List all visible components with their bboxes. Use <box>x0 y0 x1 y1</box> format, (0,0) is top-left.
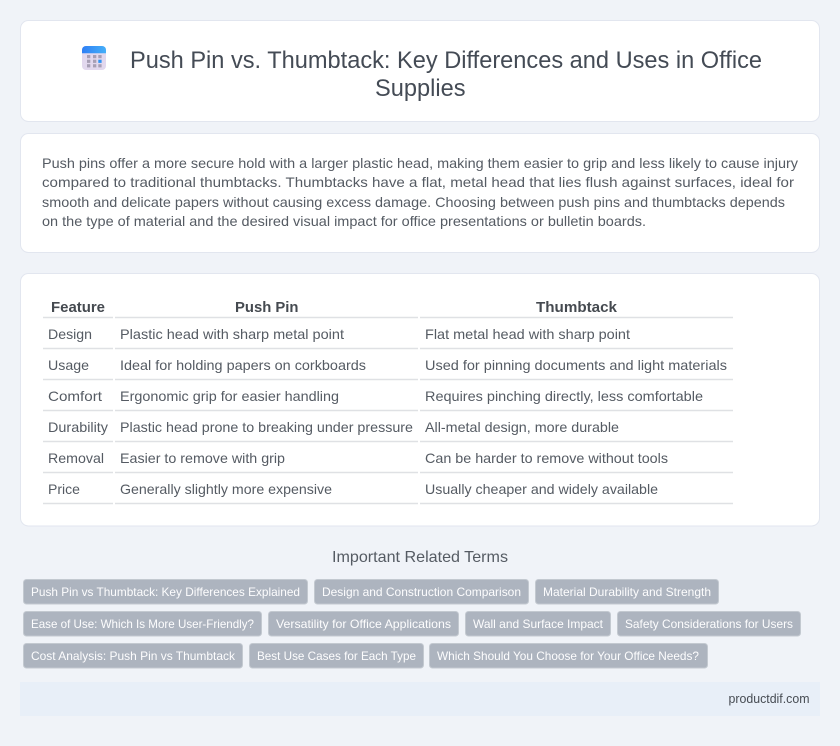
tags <box>24 580 800 668</box>
intro text: compared to traditional thumbtacks. Thumbtacks have a flat, metal head that lies flush against surfaces, ideal for <box>42 174 794 190</box>
tag row 2: Ease of Use: Which Is More User-Friendly? <box>31 617 254 631</box>
row: price: Generally slightly more expensive <box>120 481 332 497</box>
row: usage: Usage <box>48 357 89 373</box>
row: durability <box>48 419 619 435</box>
row: removal: Removal <box>48 450 104 466</box>
row: usage <box>48 357 727 373</box>
table header: Thumbtack <box>536 299 618 316</box>
tag row 1: Design and Construction Comparison <box>322 585 521 599</box>
tag row 3: Best Use Cases for Each Type <box>257 649 416 663</box>
panel: comparison table <box>20 274 820 526</box>
row: price: Price <box>48 481 80 497</box>
row: durability: All-metal design, more durable <box>425 419 619 435</box>
header panel <box>20 20 820 122</box>
tag row 2: Safety Considerations for Users <box>625 617 793 631</box>
panel: introduction <box>20 134 820 252</box>
tag row 1: Material Durability and Strength <box>543 585 711 599</box>
row: usage: Ideal for holding papers on corkboards <box>120 357 366 373</box>
row: design: Plastic head with sharp metal point <box>120 326 344 342</box>
row: design <box>48 326 630 342</box>
row: comfort <box>48 388 703 404</box>
tag row 3: Which Should You Choose for Your Office Needs? <box>437 649 699 663</box>
row: removal: Can be harder to remove without tools <box>425 450 668 466</box>
table header: Feature <box>51 299 105 316</box>
row: durability: Durability <box>48 419 108 435</box>
row: usage: Used for pinning documents and light materials <box>425 357 727 373</box>
tag row 1: Push Pin vs Thumbtack: Key Differences Explained <box>31 585 300 599</box>
intro text: on the type of material and the desired visual impact for office presentations or bulletin boards. <box>42 213 646 229</box>
tag row 3: Cost Analysis: Push Pin vs Thumbtack <box>31 649 236 663</box>
row: price: Usually cheaper and widely available <box>425 481 658 497</box>
intro text: Push pins offer a more secure hold with a larger plastic head, making them easier to grip and less likely to cause injury <box>42 155 798 171</box>
tag row 3 <box>24 644 708 668</box>
row: design: Flat metal head with sharp point <box>425 326 630 342</box>
icon: calendar <box>82 46 106 70</box>
footer <box>20 682 820 716</box>
row: comfort: Ergonomic grip for easier handling <box>120 388 339 404</box>
row: removal <box>48 450 668 466</box>
row: comfort: Comfort <box>48 388 102 404</box>
table header <box>51 299 618 316</box>
title: Supplies <box>375 75 466 102</box>
footer credit: productdif.com <box>728 692 810 706</box>
tag row 2: Versatility for Office Applications <box>276 617 451 631</box>
row: price <box>48 481 658 497</box>
table header: Push Pin <box>235 299 298 316</box>
tag row 2: Wall and Surface Impact <box>473 617 604 631</box>
tag row 2 <box>24 612 800 636</box>
row: comfort: Requires pinching directly, less comfortable <box>425 388 703 404</box>
intro text <box>42 155 798 229</box>
intro text: smooth and delicate papers without causing excess damage. Choosing between push pins and thumbtacks depends <box>42 194 785 210</box>
row: removal: Easier to remove with grip <box>120 450 285 466</box>
tag row 1 <box>24 580 718 604</box>
row: design: Design <box>48 326 92 342</box>
row: durability: Plastic head prone to breaking under pressure <box>120 419 413 435</box>
heading: related terms: Important Related Terms <box>332 549 508 566</box>
title: Push Pin vs. Thumbtack: Key Differences and Uses in Office <box>130 47 762 74</box>
title <box>130 47 762 102</box>
